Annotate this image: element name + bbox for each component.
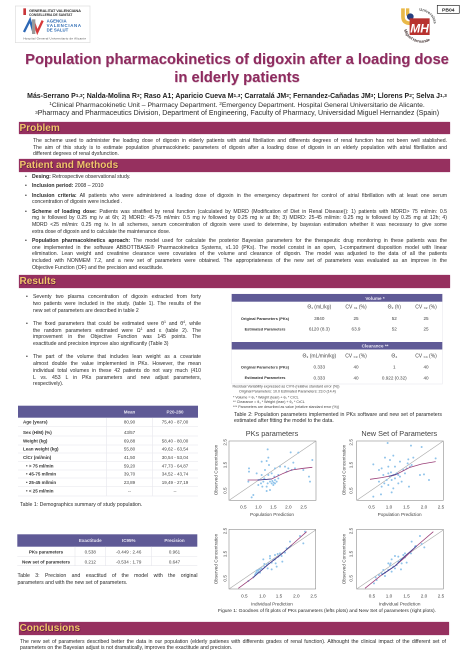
table 1: demographics: 34,52 - 43,74 <box>162 472 189 477</box>
affiliations: 1Clinical Pharmacokinetic Unit – Pharmacy Department. 2Emergency Department. Hospital General Universitario de Alicante. <box>49 102 425 109</box>
authors: Más-Serrano P1,3; Nalda-Molina R3; Raso A1; Aparicio Cueva M1,3; Carratalá JM2; Fernandez-Cañadas JM3; Llorens P2; Selva J1,3 <box>27 93 447 100</box>
scatter plot: PKs parameters, individual prediction: 1.5 <box>276 593 283 598</box>
text: methods list: concentration of digoxin were included . <box>32 199 122 205</box>
scatter plot: new set of parameters, individual prediction: 1.5 <box>403 593 410 598</box>
caption: table 2: estimated after fitting the model to the data. <box>234 418 334 424</box>
table 2: population parameters: 63.9 <box>352 327 361 332</box>
table 2 notes: * Volume = θ₁ * Weight (lean) + θ₂ * CrCL <box>233 396 299 400</box>
table 3: precision and exactitude <box>17 534 197 566</box>
scatter plot: new set of parameters, individual prediction: 2.0 <box>421 593 428 598</box>
text: problem <box>33 138 447 157</box>
heading: patient and methods: Patient and Methods <box>20 160 118 171</box>
table 2: population parameters: 3840 <box>314 316 325 321</box>
text: methods list: • <box>25 238 27 244</box>
scatter plot: new set of parameters, individual prediction: 1.0 <box>386 593 393 598</box>
table 1: demographics: 80,90 <box>124 419 136 424</box>
scatter plot: new set of parameters, population prediction <box>341 429 445 517</box>
scatter plot: new set of parameters, population prediction: 0.5 <box>368 504 375 509</box>
scatter plot: PKs parameters, individual prediction: Observed Concentration <box>213 533 218 584</box>
scatter plot: PKs parameters, population prediction: 0.5 <box>222 487 227 494</box>
table 1: demographics: 41,50 <box>124 455 136 460</box>
text: results bullets: almost double the value implemented in PKs. However, the mean <box>33 361 201 367</box>
text: methods list: • <box>25 209 27 215</box>
text: results bullets: respectively). <box>33 381 63 387</box>
table 1: demographics: 75,40 - 87,00 <box>162 419 189 424</box>
text: problem: The scheme used to administer the loading dose of digoxin in elderly patients with atrial fibrillation and differents degrees of renal function has not been well stablished. <box>33 138 447 144</box>
text: methods list: included with NONMEM 7.2, and a new set of parameters were obtained. The appropriateness of the new set of parameters was evaluated as an improve in the <box>32 258 447 264</box>
table 2: population parameters: 40 <box>353 375 359 380</box>
scatter plot: new set of parameters, population prediction: 1.5 <box>403 504 410 509</box>
scatter plot: new set of parameters, population prediction: Population Prediction <box>378 512 422 517</box>
scatter plot: new set of parameters, population prediction: Observed Concentration <box>341 444 346 495</box>
table 2: population parameters <box>232 294 442 384</box>
scatter plot: PKs parameters, population prediction: 2.5 <box>300 504 307 509</box>
table 2: population parameters: 40 <box>423 365 429 370</box>
text: conclusions: The new set of parameters described better the data in our population (elderly patienes with differents grades of renal function). Althought the clinical impact of the different set of <box>20 639 446 645</box>
caption: table 3 <box>18 573 198 586</box>
label: PB04 <box>437 5 459 13</box>
table 2: population parameters: 25 <box>353 316 359 321</box>
caption: table 1: Table 1: Demographics summary of study population. <box>20 502 142 508</box>
table 2: population parameters: 52 <box>392 316 397 321</box>
table 3: precision and exactitude: New set of parameters <box>22 559 71 564</box>
scatter plot: new set of parameters, population prediction: 1.5 <box>348 461 353 468</box>
table 2: population parameters: Original Parameters (PKs) <box>241 316 290 321</box>
table 2: population parameters: CV ₀₂ (%) <box>415 305 437 311</box>
heading: conclusions <box>18 622 448 634</box>
scatter plot: new set of parameters, individual prediction: Observed Concentration <box>341 533 346 584</box>
table 2 notes: Original Parameters: 10.0 Estimated Parameters: 23.0 (14.4) <box>239 390 336 394</box>
table 2: population parameters: 0.333 <box>314 375 325 380</box>
title: in elderly patients <box>174 70 300 86</box>
table 3: precision and exactitude: 0.647 <box>169 559 181 564</box>
scatter plot: new set of parameters, individual prediction <box>341 527 445 606</box>
table 3: precision and exactitude: -0.534 : 1.79 <box>116 559 142 564</box>
heading: conclusions: Conclusions <box>20 623 80 634</box>
scatter plot: new set of parameters, population prediction: 0.5 <box>348 487 353 494</box>
text: results bullets: individual total volumes in these 42 patients do not vary much (410 <box>33 368 201 374</box>
table 1: demographics: 39,70 <box>124 472 136 477</box>
table 1: demographics: 49,62 - 63,54 <box>162 447 189 452</box>
table 2: population parameters: CV ₀₁ (%) <box>345 305 367 311</box>
scatter plot: PKs parameters, population prediction <box>213 429 316 517</box>
logo: Agència Valenciana de Salut: GENERALITAT VALENCIANA <box>29 8 81 13</box>
scatter plot: new set of parameters, population prediction: 1.0 <box>386 504 393 509</box>
table 1: demographics: 69,88 <box>124 438 136 443</box>
table 3: precision and exactitude: 0.538 <box>85 549 96 554</box>
table 1: demographics: 43/57 <box>124 430 136 435</box>
scatter plot: PKs parameters, population prediction: 1.5 <box>222 461 227 468</box>
scatter plot: PKs parameters, individual prediction: Individual Prediction <box>251 601 293 606</box>
scatter plot: PKs parameters, population prediction: Population Prediction <box>250 512 294 517</box>
table 2 notes: ** Clearance = θ₃ * Weight (lean) + θ₄ * CrCL <box>233 400 305 404</box>
table 2: population parameters: Original Parameters (PKs) <box>241 364 290 370</box>
scatter plot: new set of parameters, population prediction: 2.5 <box>348 439 353 446</box>
table 2: population parameters: Θ₁ (mL/kg) <box>307 305 332 311</box>
logo: Agència Valenciana de Salut: Hospital General Universitario de Alicante <box>23 36 86 40</box>
logo: Universidad Miguel Hernandez <box>401 8 436 43</box>
scatter plot: PKs parameters, individual prediction <box>213 527 317 606</box>
table 2: population parameters: CV ₀₃ (%) <box>345 354 367 360</box>
table 2: population parameters: 0.333 <box>314 365 325 370</box>
table 2: population parameters: 25 <box>423 316 429 321</box>
affiliations <box>35 102 439 117</box>
table 1: demographics: 19,49 - 27,19 <box>162 480 189 485</box>
table 1: demographics: • 25-45 ml/min <box>26 480 56 485</box>
scatter plot: PKs parameters, individual prediction: 1.5 <box>222 550 227 557</box>
table 2: population parameters: Θ₂ (h) <box>388 305 401 311</box>
table 1: demographics: Sex (H/M) (%) <box>23 430 52 435</box>
scatter plot: new set of parameters, individual prediction: 0.5 <box>369 593 376 598</box>
scatter plot: PKs parameters, population prediction: 2.0 <box>285 504 292 509</box>
caption: figure 1: Figure 1: Goodnes of fit plots of PKs parameters (lefts plots) and New Set of parameters (right plots). <box>218 609 436 614</box>
text: methods list: Inclusion period: 2008 – 2010 <box>32 183 103 189</box>
text: methods list: Desing: Retrospective observational study. <box>32 174 130 180</box>
table 2: population parameters: Estimated Parameters <box>245 326 285 332</box>
text: methods list: Objective Function (OF) and the precision and exactitude. <box>32 265 163 271</box>
text: results bullets: new set of parameters are described in table 2 <box>33 308 139 314</box>
table 1: demographics: P20-280 <box>166 409 184 414</box>
logo: Universidad Miguel Hernandez: MH <box>410 21 429 35</box>
text: methods list <box>25 174 447 271</box>
table 1: demographics: 58,40 - 80,00 <box>162 438 189 443</box>
scatter plot: PKs parameters, individual prediction: 1.0 <box>259 593 266 598</box>
table 2: population parameters: Volume * <box>365 296 385 301</box>
text: results bullets: • <box>26 294 28 300</box>
scatter plot: PKs parameters, individual prediction: 0.5 <box>222 575 227 582</box>
scatter plot: new set of parameters, individual prediction: 1.5 <box>348 550 353 557</box>
heading: problem <box>18 122 450 134</box>
text: conclusions: parameters on the Bayesian adjust is not dramatically, improves the exactitude and precision. <box>20 645 232 651</box>
text: results bullets: two patients were included in the study. (table 1). The results of the <box>33 301 201 307</box>
text: results bullets <box>26 294 201 387</box>
caption: table 2: Table 2: Population parameters implemented in PKs software and new set of parameters <box>234 412 442 418</box>
text: results bullets: The fixed parameters that could be estimated were θ1 and θ4, while <box>33 320 201 327</box>
scatter plot: PKs parameters, individual prediction: 0.5 <box>241 593 248 598</box>
text: conclusions <box>20 639 446 651</box>
table 3: precision and exactitude: 0.212 <box>85 559 96 564</box>
table 2 notes: *** Parameters are described as value (relative standard error (%)) <box>233 405 339 409</box>
table 1: demographics <box>18 406 198 496</box>
text: results bullets: The part of the volume that includes lean weight as a covariate <box>33 354 201 360</box>
table 3: precision and exactitude: -0.449 : 2.46 <box>116 549 142 554</box>
table 3: precision and exactitude: PKs parameters <box>29 549 64 554</box>
caption: table 3: parameters and with the new set of parameters. <box>18 580 127 586</box>
title <box>25 52 449 86</box>
logo: Agència Valenciana de Salut <box>15 6 90 43</box>
table 1: demographics: -- <box>128 488 131 493</box>
text: methods list: mg iv followed by 0.25 mg iv at 6h; 2) MDRD: 45-75 ml/min: 0.5 mg iv followed by 0.25 mg iv at 8h; 3) MDRD: 25-45 ml/min: 0.25 mg iv followed by 0.25 mg at 12h; 4) <box>32 215 447 221</box>
table 1: demographics: Mean <box>124 409 135 414</box>
caption: table 3: Table 3: Precision and exactitud of the model with the original <box>18 573 198 579</box>
table 2: population parameters: Θ₄ <box>391 354 397 360</box>
table 2 notes: Residual Variability expressed as CV% (relative standard error (%)) <box>232 385 340 389</box>
scatter plot: PKs parameters, population prediction: 1.0 <box>255 504 262 509</box>
text: results bullets: exactitude and precision improve also significantly (Table 3) <box>33 341 168 347</box>
table 1: demographics: 23,89 <box>124 480 136 485</box>
text: methods list: Population pharmacokinetics aproach: The model used for calculate the posterior Bayesian parameters for the therapeutic drug monitoring in these patients was the <box>32 238 447 244</box>
logo: Agència Valenciana de Salut: AGENCIA <box>47 19 67 24</box>
heading: results: Results <box>20 276 56 287</box>
text: results bullets: • <box>26 354 28 360</box>
scatter plot: PKs parameters, population prediction: Observed Concentration <box>213 444 218 495</box>
label: PB04: PB04 <box>442 7 455 13</box>
table 3: precision and exactitude: Precision <box>164 538 185 543</box>
text: methods list: • <box>25 193 27 199</box>
logo: Universidad Miguel Hernandez: Universitas <box>420 8 436 24</box>
table 1: demographics: • < 25 ml/min <box>26 488 54 493</box>
table 2: population parameters: 25 <box>423 327 429 332</box>
scatter plot: PKs parameters, individual prediction: 2.5 <box>222 527 227 534</box>
heading: results <box>18 275 450 288</box>
scatter plot: new set of parameters, individual prediction: 2.5 <box>438 593 445 598</box>
scatter plot: PKs parameters, individual prediction: 2.0 <box>293 593 300 598</box>
table 3: precision and exactitude: IC95% <box>122 538 135 543</box>
scatter plot: PKs parameters, population prediction: 0.5 <box>240 504 247 509</box>
table 2: population parameters: Clearance ** <box>362 344 389 349</box>
table 1: demographics: 55,80 <box>124 447 136 452</box>
table 1: demographics: ClCr (ml/min) <box>23 455 52 460</box>
scatter plot: new set of parameters, individual prediction: Individual Prediction <box>379 601 421 606</box>
table 2: population parameters: Estimated Parameters <box>245 375 285 380</box>
text: methods list: elimination. Lean weight and creatinine clearance were covariates of the volume and clearance of digoxin. The model was adjusted to the data of all the patients <box>32 251 447 257</box>
table 2: population parameters: 40 <box>353 365 359 370</box>
table 2: population parameters: CV ₀₄ (%) <box>415 354 437 360</box>
table 1: demographics: -- <box>174 488 177 493</box>
scatter plot: PKs parameters, population prediction: 1.5 <box>270 504 277 509</box>
caption: table 2 <box>234 412 442 424</box>
table 2: population parameters: Θ₃ (mL/min/kg) <box>302 354 336 360</box>
text: results bullets: • <box>26 321 28 327</box>
text: methods list: • <box>25 174 27 180</box>
table 1: demographics: • > 75 ml/min <box>26 463 54 468</box>
table 2: population parameters: 1 <box>393 365 396 370</box>
scatter plot: new set of parameters, population prediction: New Set of Parameters <box>361 429 438 438</box>
scatter plot: new set of parameters, individual prediction: 2.5 <box>348 527 353 534</box>
table 2: population parameters: 52 <box>392 327 397 332</box>
text: problem: The aim of this study is to estimate population pharmacokinetic parameters of digoxin after a loading dose of digoxin in an elderly population with atrial fibrillation and <box>33 145 447 151</box>
scatter plot: PKs parameters, population prediction: PKs parameters <box>246 429 299 438</box>
scatter plot: PKs parameters, individual prediction: 2.5 <box>310 593 317 598</box>
text: methods list: MDRD <25 ml/min: 0.25 mg iv. In all schemes, serum concentration of digoxin were used to determine, by bayesian estimation whether it was necessary to give some <box>32 222 447 228</box>
table 3: precision and exactitude: Exactitude <box>79 538 102 543</box>
table 1: demographics: Age (years) <box>23 419 48 424</box>
scatter plot: new set of parameters, individual prediction: 0.5 <box>348 575 353 582</box>
text: methods list: extra dose of digoxin and to calculate the maintenance dose. <box>32 229 170 235</box>
scatter plot: new set of parameters, population prediction: 2.5 <box>438 504 445 509</box>
table 1: demographics: Weight (kg) <box>23 438 48 443</box>
text: methods list: one implemented in the software ABBOTTBASE® Pharmacokinetics Systems, v1.10 (PKs). The model consist in an open, 1-compartment disposition model with linear <box>32 245 447 251</box>
table 2: population parameters: 6120 (8.3) <box>309 327 330 332</box>
title: Population pharmacokinetics of digoxin after a loading dose <box>25 52 449 68</box>
heading: problem: Problem <box>20 122 60 134</box>
text: methods list: • <box>25 183 27 189</box>
text: results bullets: L vs. 453 L in PKs parameters and new adjust parameters, <box>33 375 201 381</box>
logo: Agència Valenciana de Salut: VALENCIANA <box>47 23 82 28</box>
text: problem: different degrees of renal dysfunction. <box>33 151 119 157</box>
affiliations: 3Pharmacy and Pharmaceutics Division, Department of Engineering, Faculty of Pharmacy, Universidad Miguel Hernandez (Spain) <box>35 110 439 117</box>
table 1: demographics: • 45-75 ml/min <box>26 472 56 477</box>
scatter plot: new set of parameters, population prediction: 2.0 <box>421 504 428 509</box>
table 1: demographics: 30,54 - 53,04 <box>162 455 189 460</box>
scatter plot: PKs parameters, population prediction: 2.5 <box>222 439 227 446</box>
heading: patient and methods <box>18 159 450 172</box>
text: methods list: Inclusion criteria: All patients who were administered a loading dose of digoxin in the emergency department for control of atrial fibrillation with at least one serum <box>32 193 447 199</box>
text: results bullets: Seventy two plasma concentration of digoxin extracted from forty <box>33 294 201 300</box>
table 1: demographics: 47,73 - 64,87 <box>162 463 189 468</box>
logo: Agència Valenciana de Salut: CONSELLERIA DE SANITAT <box>29 13 72 17</box>
text: results bullets: improvement in the Objective Function was 145 points. The <box>33 334 201 340</box>
table 2: population parameters: 0.922 (0.32) <box>382 375 407 380</box>
table 2: population parameters: 40 <box>423 375 429 380</box>
text: results bullets: the random parameters estimated were Ω1 and ε (table 2). The <box>33 327 201 334</box>
table 1: demographics: Lean weight (kg) <box>23 447 59 452</box>
table 1: demographics: 59,20 <box>124 463 136 468</box>
text: methods list: Scheme of loading dose: Patients was stratified by renal function (calculated by MDRD (Modification of Diet in Renal Disease)): 1) patients with MDRD> 75 ml/min: 0.5 <box>32 209 447 215</box>
table 2 notes <box>232 385 340 409</box>
table 3: precision and exactitude: 0.961 <box>169 549 181 554</box>
logo: Agència Valenciana de Salut: DE SALUT <box>47 27 69 32</box>
